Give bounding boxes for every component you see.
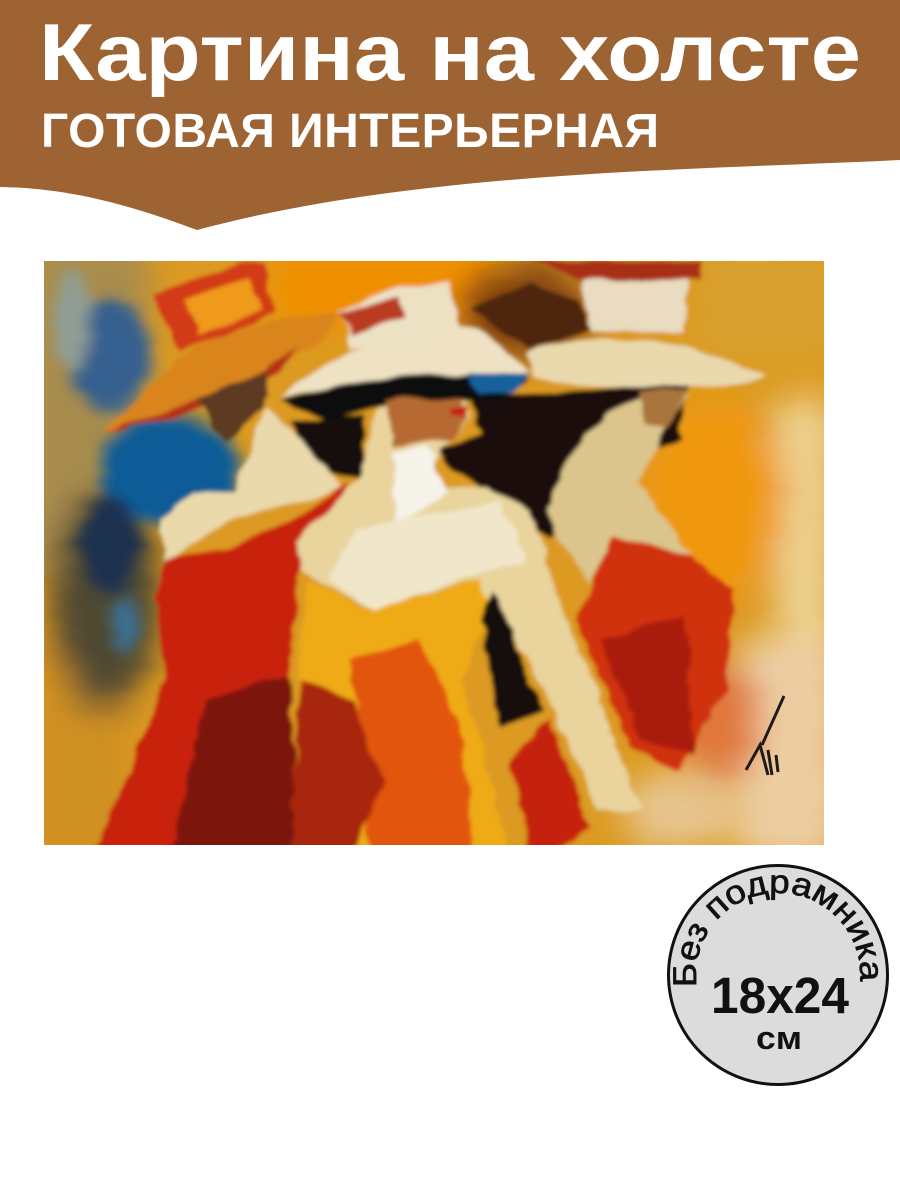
painting background — [44, 261, 824, 845]
figure: right woman — [470, 261, 766, 772]
blue strokes — [54, 270, 240, 651]
badge unit: см — [756, 1020, 802, 1056]
artist signature — [746, 696, 784, 775]
figure: left woman — [90, 263, 365, 860]
figure: centre woman — [280, 282, 640, 860]
badge: size without stretcher — [667, 864, 889, 1086]
badge size: 18х24 — [711, 967, 850, 1024]
subtitle: ГОТОВАЯ ИНТЕРЬЕРНАЯ — [41, 105, 659, 158]
header banner — [0, 0, 900, 230]
title: Картина на холсте — [39, 8, 861, 98]
badge arc text: Без подрамника — [673, 875, 878, 984]
painting: three women in hats — [44, 261, 824, 845]
